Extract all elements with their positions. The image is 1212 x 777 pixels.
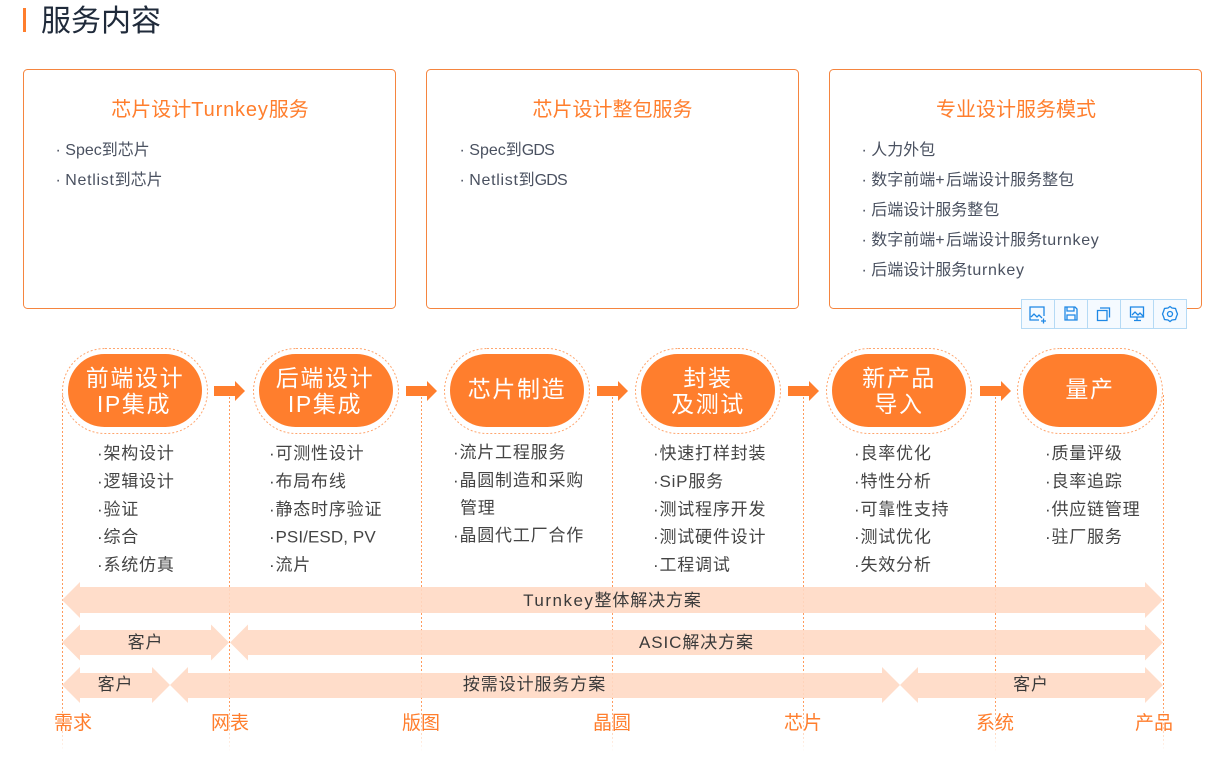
milestone labels: 版图 — [402, 712, 440, 734]
stage: new product introduction: 导入 — [874, 391, 924, 417]
stage: front-end design: ·综合 — [97, 528, 139, 546]
panel: Turnkey service: 芯片设计Turnkey服务 — [111, 98, 309, 121]
band: customer, short section — [62, 667, 170, 703]
stage: front-end design — [62, 348, 208, 574]
milestone guide lines — [62, 395, 1164, 752]
panel: professional design service mode: · 人力外包 — [862, 141, 935, 159]
stage: packaging and test: ·SiP服务 — [653, 472, 724, 491]
stage: packaging and test: 及测试 — [671, 391, 745, 417]
panel: full package service: · Netlist到GDS — [460, 171, 567, 189]
panel: Turnkey service: · Spec到芯片 — [56, 141, 150, 159]
stage: back-end design: ·静态时序验证 — [269, 500, 382, 519]
band: customer, front section: 客户 — [128, 633, 163, 652]
stage: mass production — [1018, 348, 1162, 546]
band: on-demand design service: 按需设计服务方案 — [463, 675, 606, 694]
stage: back-end design: ·布局布线 — [269, 472, 347, 491]
stage: packaging and test: ·工程调试 — [653, 556, 731, 574]
panel: professional design service mode: · 后端设计服务整包 — [862, 201, 999, 219]
panel: Turnkey service — [24, 70, 396, 308]
process arrows — [214, 381, 1011, 401]
stage: mass production: 量产 — [1065, 376, 1115, 402]
stage: new product introduction: 新产品 — [862, 365, 936, 391]
panel: professional design service mode: · 数字前端+后端设计服务turnkey — [862, 231, 1100, 249]
stage: back-end design: ·PSI/ESD, PV — [269, 528, 376, 546]
band: customer, back section: 客户 — [1013, 675, 1049, 694]
panel: full package service: · Spec到GDS — [460, 141, 554, 159]
milestone labels: 产品 — [1135, 712, 1173, 734]
stage: mass production: ·驻厂服务 — [1045, 528, 1123, 546]
panel: professional design service mode — [830, 70, 1202, 308]
stage: front-end design: ·架构设计 — [97, 444, 175, 463]
stage: chip manufacturing: ·流片工程服务 — [453, 443, 566, 462]
band: Turnkey total solution: Turnkey整体解决方案 — [523, 591, 702, 610]
panel: Turnkey service: · Netlist到芯片 — [56, 171, 163, 189]
stage: chip manufacturing: ·晶圆制造和采购 — [453, 471, 584, 490]
stage: front-end design: ·逻辑设计 — [97, 472, 175, 491]
stage: new product introduction: ·测试优化 — [854, 528, 932, 546]
panel: full package service — [426, 70, 798, 308]
stage: packaging and test: ·快速打样封装 — [653, 444, 766, 463]
stage: chip manufacturing: ·晶圆代工厂合作 — [453, 526, 584, 545]
milestone labels — [54, 712, 1173, 734]
stage: mass production: ·质量评级 — [1045, 444, 1123, 463]
stage: front-end design: ·系统仿真 — [97, 556, 175, 574]
stage: back-end design: ·可测性设计 — [269, 444, 364, 463]
stage: mass production: ·供应链管理 — [1045, 500, 1140, 519]
milestone labels: 晶圆 — [593, 713, 631, 734]
panel: professional design service mode: · 后端设计服务turnkey — [862, 261, 1025, 279]
milestone labels: 网表 — [211, 712, 249, 734]
band: on-demand design service — [170, 667, 900, 703]
milestone labels: 芯片 — [784, 712, 822, 734]
toolbar icons — [1022, 300, 1186, 328]
stage: new product introduction — [826, 348, 972, 574]
stage: front-end design: IP集成 — [97, 391, 171, 417]
band: ASIC solution — [230, 624, 1163, 660]
band: Turnkey total solution — [62, 582, 1163, 618]
stage: back-end design: ·流片 — [269, 556, 311, 574]
milestone labels: 系统 — [976, 712, 1014, 734]
stage: packaging and test: 封装 — [683, 365, 733, 391]
band: ASIC solution: ASIC解决方案 — [639, 633, 754, 652]
panel: full package service: 芯片设计整包服务 — [532, 98, 692, 121]
stage: front-end design: 前端设计 — [86, 365, 184, 391]
stage: packaging and test: ·测试硬件设计 — [653, 528, 766, 546]
stage: mass production: ·良率追踪 — [1045, 472, 1123, 491]
band: customer, front section — [62, 624, 229, 660]
stage: new product introduction: ·失效分析 — [854, 556, 932, 574]
stage: packaging and test — [636, 348, 780, 574]
stage: packaging and test: ·测试程序开发 — [653, 500, 766, 519]
stage: new product introduction: ·良率优化 — [854, 444, 932, 463]
panel: professional design service mode: 专业设计服务模式 — [936, 98, 1096, 121]
stage: chip manufacturing: 芯片制造 — [468, 376, 566, 402]
panel: professional design service mode: · 数字前端+后端设计服务整包 — [862, 171, 1074, 189]
stage: new product introduction: ·可靠性支持 — [854, 500, 949, 519]
band: customer, short section: 客户 — [98, 675, 133, 694]
stage: front-end design: ·验证 — [97, 500, 139, 519]
stage: chip manufacturing — [444, 348, 590, 545]
stage: chip manufacturing: 管理 — [460, 498, 496, 518]
band: customer, back section — [900, 667, 1163, 703]
stage: back-end design: IP集成 — [288, 391, 362, 417]
stage: back-end design: 后端设计 — [276, 365, 374, 391]
stage: new product introduction: ·特性分析 — [854, 472, 932, 491]
milestone labels: 需求 — [54, 712, 92, 734]
stage: back-end design — [254, 348, 398, 574]
title: 服务内容 — [41, 5, 161, 38]
